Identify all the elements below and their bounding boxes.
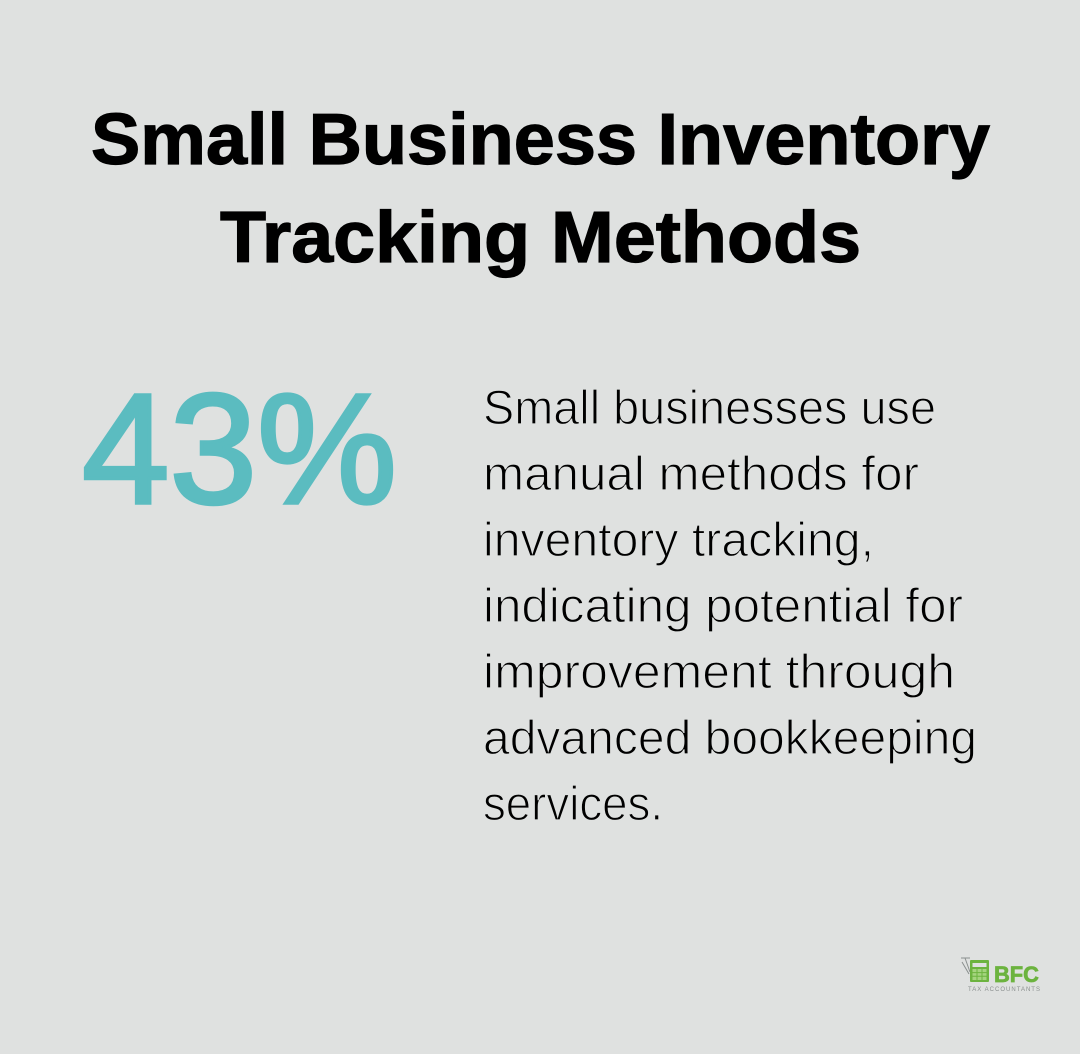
title: Small Business Inventory [91, 100, 990, 180]
description text block: manual methods for [483, 448, 919, 501]
description text block [483, 382, 977, 831]
description text block: inventory tracking, [483, 514, 874, 567]
logo tagline: TAX ACCOUNTANTS [968, 987, 1040, 993]
description text block: services. [483, 778, 663, 831]
description text block: improvement through [483, 646, 955, 699]
big statistic: 43%: 43% [82, 362, 397, 537]
icon: calculator with papers [961, 958, 989, 982]
description text block: Small businesses use [483, 382, 936, 435]
logo wordmark: BFC [994, 962, 1039, 987]
description text block: advanced bookkeeping [483, 712, 977, 765]
description text block: indicating potential for [483, 580, 963, 633]
logo: BFC Tax Accountants [961, 958, 1040, 993]
title: Tracking Methods [220, 198, 861, 278]
title [91, 100, 990, 278]
